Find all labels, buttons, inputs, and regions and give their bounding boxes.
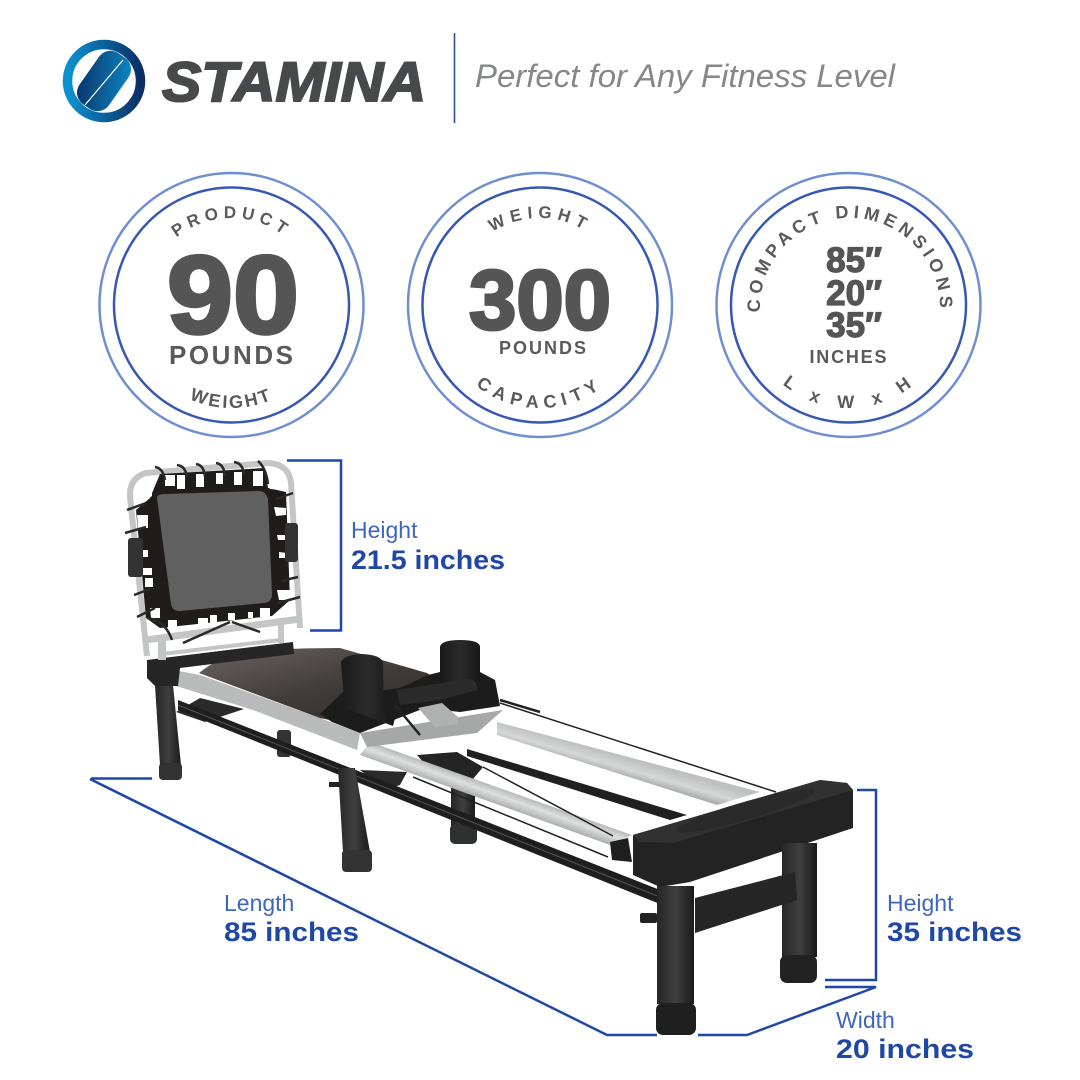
front double bars [178, 700, 660, 904]
shoulder rests [320, 640, 500, 733]
dimension line: width [698, 987, 876, 1035]
trampoline web [136, 468, 290, 628]
upholstered carriage pad [199, 648, 470, 722]
icon: logo mark [68, 44, 140, 118]
foot bar block [633, 780, 853, 887]
dimension line: length [90, 779, 657, 1035]
rear foam block [440, 640, 480, 682]
side grips [128, 523, 298, 577]
crossbar [695, 872, 797, 933]
badge: weight capacity: POUNDS [499, 338, 586, 358]
label: height 35 inches: Height [887, 890, 954, 916]
badge: compact dimensions: 20″ [826, 274, 882, 313]
trampoline frame [130, 463, 300, 660]
label: length 85 inches [224, 890, 359, 947]
label: width 20 inches [836, 1007, 974, 1064]
badge: compact dimensions: 85″ [826, 241, 882, 280]
product photo: reformer machine [125, 461, 853, 1035]
headrest block [147, 642, 294, 686]
badge: compact dimensions [715, 172, 982, 438]
label: height 21.5 inches: 21.5 inches [351, 545, 505, 575]
silver bracket [418, 703, 458, 727]
trampoline mat [157, 491, 272, 611]
label: length 85 inches: Length [224, 890, 294, 916]
badge: product weight [98, 172, 365, 438]
badge: compact dimensions: COMPACT DIMENSIONS [747, 206, 952, 312]
label: height 21.5 inches [351, 517, 505, 575]
badge: product weight: 90 [167, 234, 299, 357]
cords [483, 767, 613, 836]
badge: product weight: POUNDS [169, 340, 293, 370]
middle front leg [329, 768, 372, 872]
spring cords at carriage [395, 700, 540, 735]
label: width 20 inches: Width [836, 1007, 895, 1033]
label: height 35 inches: 35 inches [887, 917, 1022, 947]
tagline: Perfect for Any Fitness Level [475, 58, 896, 94]
rear foot leg and cap [780, 843, 817, 983]
front foot leg and cap [640, 886, 696, 1035]
label: height 21.5 inches: Height [351, 517, 418, 543]
front foam block [341, 654, 395, 726]
badge: compact dimensions: 35″ [826, 306, 882, 345]
pulley [610, 838, 632, 862]
back rail and cords [467, 703, 776, 820]
label: length 85 inches: 85 inches [224, 917, 359, 947]
silver carriage frame [173, 670, 503, 750]
cords of trampoline [125, 461, 300, 643]
badge: product weight: PRODUCT [170, 206, 289, 237]
badge: product weight: WEIGHT [192, 388, 268, 408]
dark strap mass [320, 672, 500, 733]
logo: Stamina [68, 44, 426, 118]
middle rear leg [277, 730, 477, 844]
badge: weight capacity [406, 172, 674, 438]
hand rest [397, 679, 477, 705]
web holes [137, 471, 290, 628]
label: width 20 inches: 20 inches [836, 1034, 974, 1064]
badge: compact dimensions: L x W x H [783, 375, 911, 408]
wordmark: STAMINA [162, 50, 426, 113]
badge: weight capacity: WEIGHT [486, 206, 588, 230]
support plates [176, 698, 483, 790]
front rail [360, 742, 632, 845]
badge: weight capacity: CAPACITY [478, 378, 596, 408]
badge: compact dimensions: INCHES [810, 347, 886, 367]
headrest leg [155, 685, 182, 780]
badge: weight capacity: 300 [469, 253, 611, 347]
dimension bracket: height 21.5 [287, 460, 341, 630]
label: height 35 inches [887, 890, 1022, 947]
dimension bracket: height 35 [825, 790, 876, 980]
